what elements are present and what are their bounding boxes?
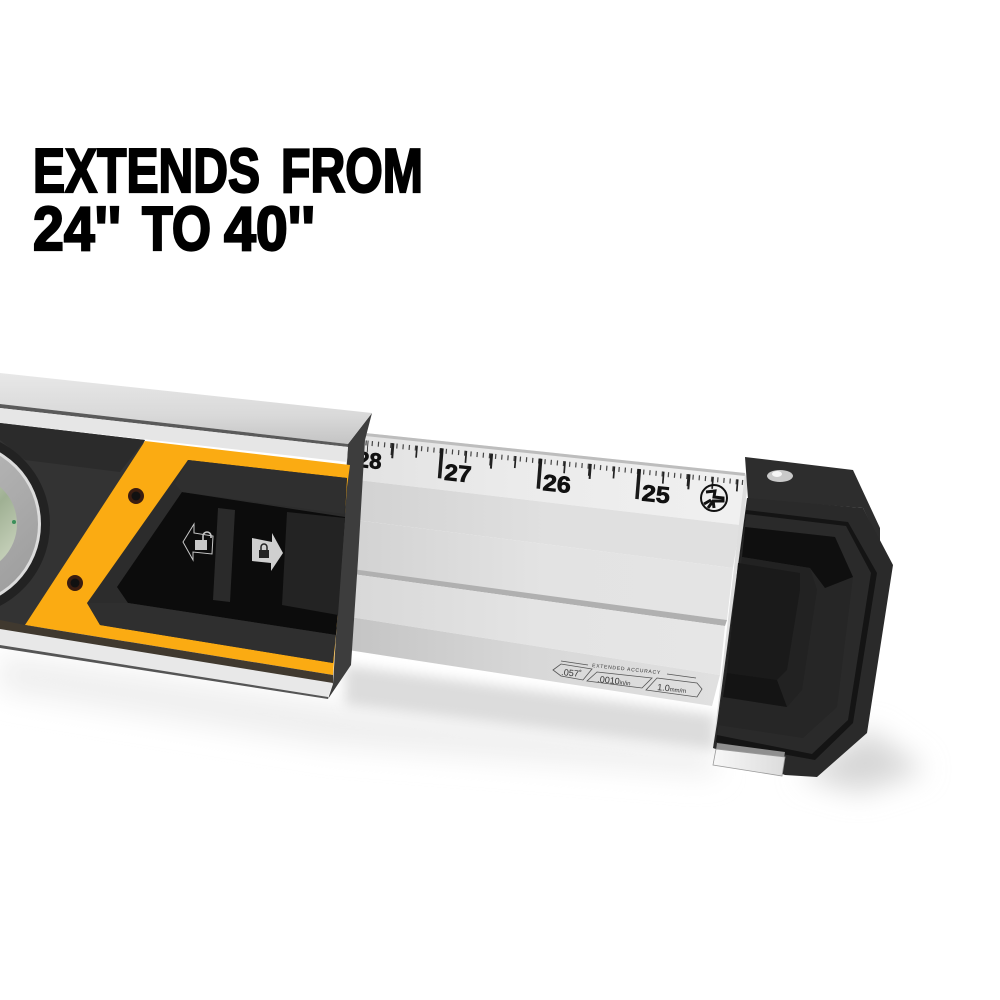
lower silver strip xyxy=(0,629,333,697)
cap recess xyxy=(718,527,853,738)
bubble vial xyxy=(0,432,50,616)
inner dark panel xyxy=(87,460,347,663)
inner raised block xyxy=(723,557,817,707)
extended ruler blade xyxy=(348,433,748,745)
upper lip xyxy=(175,460,347,514)
icon: tripod symbol xyxy=(701,485,727,511)
icon: lock arrow xyxy=(252,533,283,571)
recess dark slot xyxy=(723,673,787,707)
screw lower xyxy=(67,575,83,591)
number 26: 26 xyxy=(542,469,572,498)
open padlock xyxy=(195,532,211,550)
screw upper xyxy=(128,488,144,504)
title: 24'' xyxy=(33,195,121,264)
screw on cap xyxy=(767,470,793,482)
front silver strip xyxy=(0,408,348,462)
value 1.0 mm/m: 1.0mm/m xyxy=(657,682,687,695)
top silver face xyxy=(0,373,372,444)
floor shadow xyxy=(0,655,925,792)
recessed slot xyxy=(117,492,345,635)
number 28: 28 xyxy=(356,447,383,474)
blade band 3 xyxy=(352,520,733,620)
panel upper wedge xyxy=(0,423,145,472)
accuracy label xyxy=(553,661,702,697)
number 27: 27 xyxy=(443,459,472,488)
title: 40'' xyxy=(224,195,315,264)
title: FROM xyxy=(281,137,423,206)
black front panel xyxy=(0,423,145,630)
level body xyxy=(0,373,372,699)
half ticks xyxy=(392,451,741,487)
lower lip xyxy=(87,603,336,663)
lower edge line xyxy=(0,645,328,699)
blade band 2 xyxy=(355,480,740,568)
quarter ticks xyxy=(367,447,741,486)
value .057: .057˚ xyxy=(561,667,582,679)
lower dark band xyxy=(0,620,333,684)
cap top face xyxy=(745,457,880,542)
yellow frame xyxy=(25,441,350,675)
top edge of the blade xyxy=(365,433,745,476)
cap inner ring xyxy=(716,510,877,760)
closed padlock xyxy=(259,544,269,558)
blade groove xyxy=(352,569,727,626)
blade band 5 xyxy=(348,617,720,706)
inner block face xyxy=(727,563,800,680)
cap ring highlight xyxy=(717,514,871,754)
end cap xyxy=(713,457,893,777)
blade end fold xyxy=(713,473,748,745)
number 25: 25 xyxy=(641,480,671,508)
title: EXTENDS xyxy=(33,137,260,206)
dark seam xyxy=(0,404,348,447)
silver foot xyxy=(713,743,785,776)
slider knob xyxy=(213,508,235,602)
end side face xyxy=(328,413,372,699)
cap outer bumper xyxy=(713,498,893,777)
ruler top band xyxy=(358,433,745,525)
value .0010 in/in: .0010in/in xyxy=(597,674,631,687)
label outlines xyxy=(553,661,702,697)
slider block xyxy=(282,512,345,615)
blade band 4 xyxy=(350,574,725,675)
sixteenth ticks xyxy=(366,443,744,483)
label title: EXTENDED ACCURACY xyxy=(592,663,661,676)
title: TO xyxy=(142,195,211,264)
recess shadow xyxy=(742,527,853,588)
inch ticks xyxy=(438,448,641,499)
icon: unlock arrow xyxy=(183,524,213,560)
ruler scale xyxy=(356,440,744,516)
title xyxy=(33,137,423,264)
